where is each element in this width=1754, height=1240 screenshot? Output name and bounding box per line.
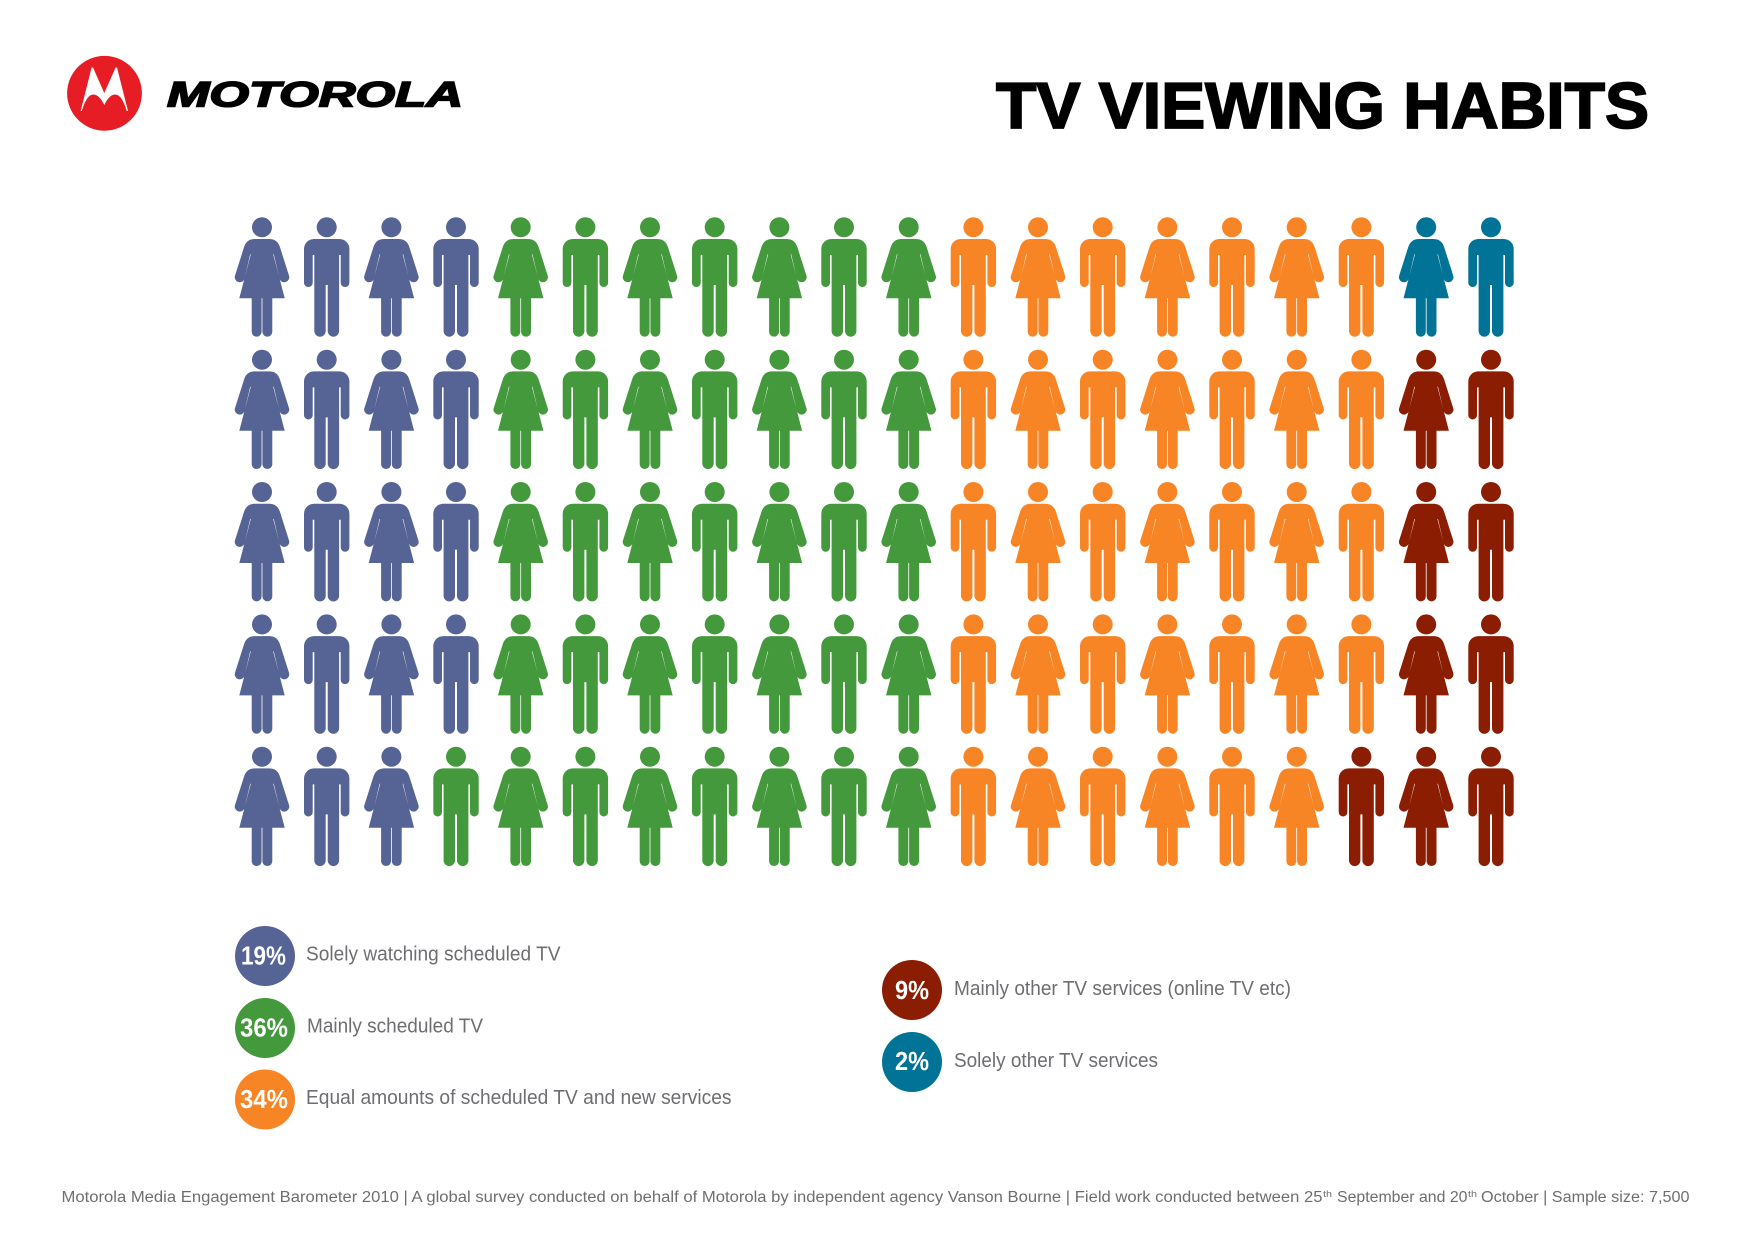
legend item: 34% equal amounts — [235, 1070, 732, 1130]
legend item: 2% solely other TV services: 2% — [895, 1046, 929, 1076]
legend item: 34% equal amounts: Equal amounts of scheduled TV and new services — [306, 1087, 732, 1109]
legend item: 9% mainly other TV services — [882, 960, 1291, 1020]
legend — [235, 926, 1291, 1130]
legend item: 36% mainly scheduled TV — [235, 998, 484, 1058]
row 4 of people — [235, 614, 1514, 734]
legend item: 34% equal amounts: 34% — [240, 1084, 288, 1114]
row 2 of people — [235, 350, 1514, 469]
legend item: 36% mainly scheduled TV: Mainly scheduled TV — [307, 1016, 484, 1038]
footer source note: Motorola Media Engagement Barometer 2010 | A global survey conducted on behalf of Motorola by independent agency Vanson Bourne | Field work conducted between 25 — [62, 1189, 1322, 1206]
icon: Motorola red circle with M — [67, 56, 142, 131]
footer source note: October | Sample size: 7,500 — [1481, 1189, 1690, 1206]
row 5 of people — [235, 747, 1514, 866]
pictogram chart: 100 people coloured by viewing habit — [235, 217, 1514, 866]
legend item: 36% mainly scheduled TV: 36% — [240, 1012, 288, 1042]
legend item: 2% solely other TV services: Solely other TV services — [954, 1050, 1158, 1072]
legend item: 9% mainly other TV services: Mainly other TV services (online TV etc) — [954, 978, 1291, 1000]
footer source note: September and 20 — [1337, 1189, 1468, 1206]
row 1 of people — [235, 217, 1514, 337]
row 3 of people — [235, 482, 1514, 601]
footer source note: th — [1323, 1189, 1332, 1200]
logo wordmark: MOTOROLA — [167, 76, 463, 114]
legend item: 2% solely other TV services — [882, 1032, 1158, 1092]
legend item: 19% solely watching scheduled TV: 19% — [241, 940, 286, 970]
legend item: 9% mainly other TV services: 9% — [895, 975, 929, 1005]
footer source note: th — [1468, 1189, 1477, 1200]
title: TV VIEWING HABITS — [996, 69, 1649, 142]
logo: Motorola — [67, 56, 463, 131]
legend item: 19% solely watching scheduled TV — [235, 926, 561, 986]
legend item: 19% solely watching scheduled TV: Solely watching scheduled TV — [306, 944, 561, 966]
